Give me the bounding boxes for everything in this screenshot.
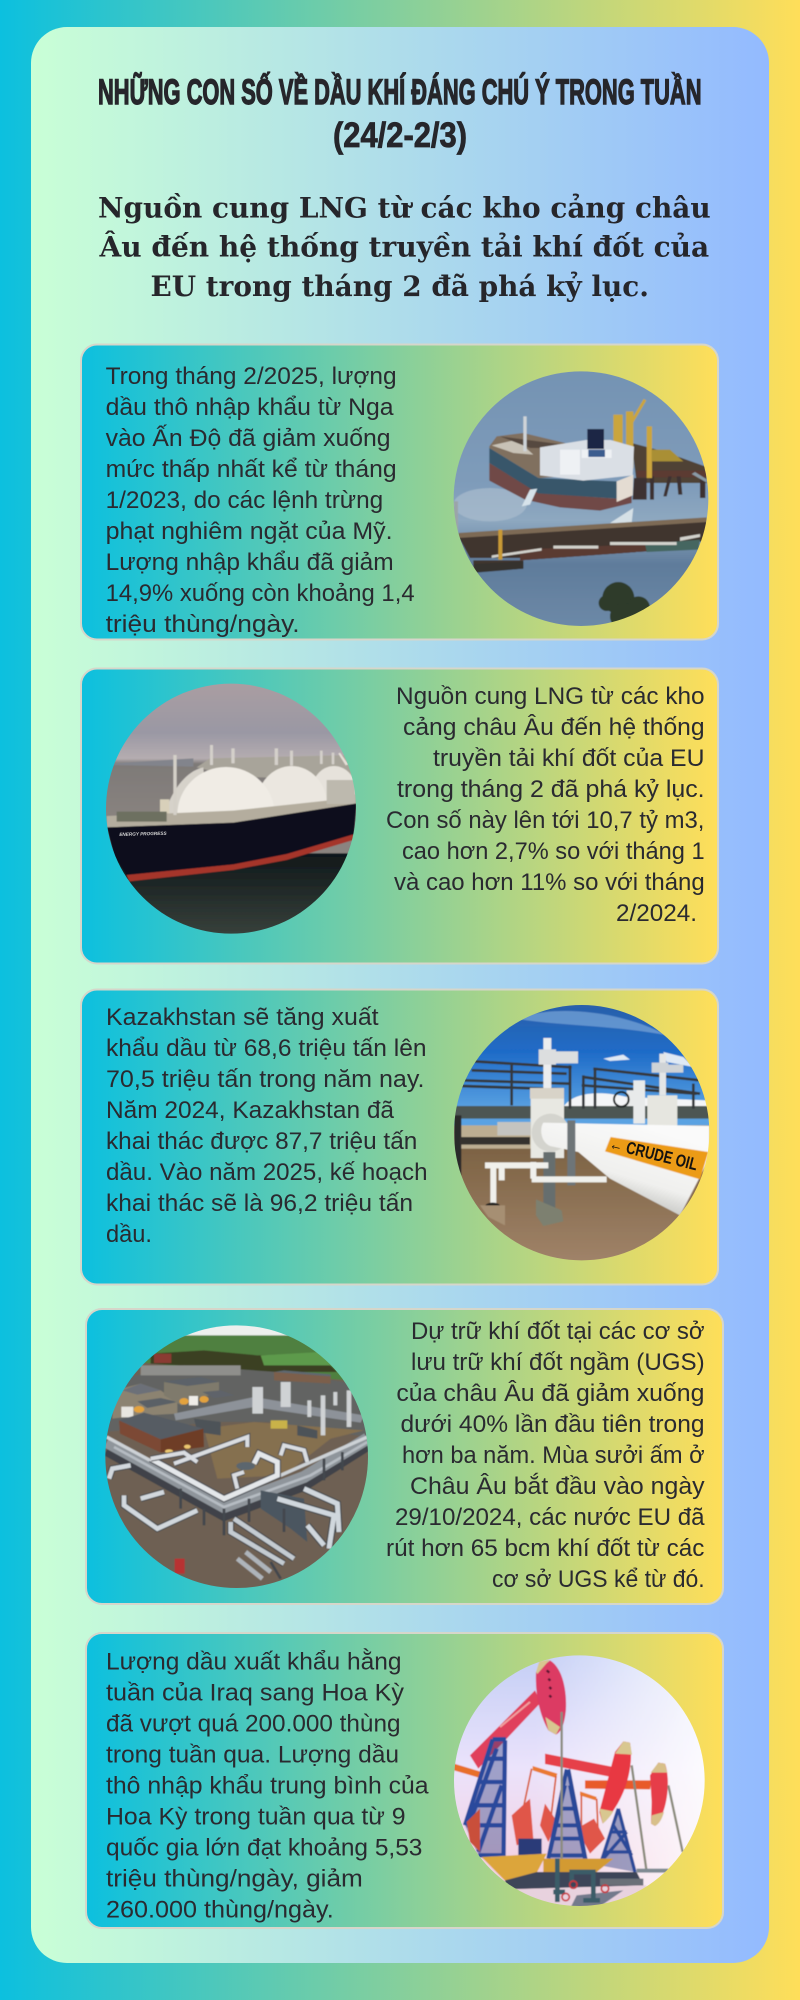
photo: crude oil pipeline <box>450 1002 717 1265</box>
card 2 text: trong tháng 2 đã phá kỷ lục. <box>397 776 705 803</box>
card 5 text: triệu thùng/ngày, giảm <box>106 1866 363 1892</box>
card 2 text <box>386 683 705 927</box>
card 3 text: Kazakhstan sẽ tăng xuất <box>106 1004 379 1031</box>
panel: card 1 India crude imports <box>81 344 718 640</box>
card 4 text: Dự trữ khí đốt tại các cơ sở <box>411 1318 705 1345</box>
card 1 text: triệu thùng/ngày. <box>106 611 300 638</box>
card 3 background <box>81 990 718 1284</box>
card 3 text: dầu. Vào năm 2025, kế hoạch <box>106 1159 427 1186</box>
card 2 text: và cao hơn 11% so với tháng <box>394 869 705 896</box>
card 5 text <box>106 1648 429 1924</box>
card 5 text: trong tuần qua. Lượng dầu <box>106 1742 399 1768</box>
card 1 text: mức thấp nhất kể từ tháng <box>106 456 397 483</box>
card 3 text: khai thác sẽ là 96,2 triệu tấn <box>106 1190 413 1217</box>
card 3 text: dầu. <box>106 1221 152 1248</box>
photo: LNG carrier: ENERGY PROGRESS <box>119 831 168 837</box>
card 5 text: 260.000 thùng/ngày. <box>106 1896 334 1924</box>
card 5 text: đã vượt quá 200.000 thùng <box>106 1710 400 1738</box>
card 1 text: dầu thô nhập khẩu từ Nga <box>106 394 394 421</box>
card 5 text: Lượng dầu xuất khẩu hằng <box>106 1648 402 1676</box>
panel: card 2 LNG supply <box>81 668 718 964</box>
card 1 text <box>106 363 415 638</box>
card 4 text: cơ sở UGS kể từ đó. <box>492 1566 705 1593</box>
photo: oil tanker at jetty <box>450 368 712 630</box>
card 2 text: cao hơn 2,7% so với tháng 1 <box>402 838 705 865</box>
photo: LNG carrier <box>100 680 362 942</box>
subtitle: Âu đến hệ thống truyền tải khí đốt của <box>98 230 709 264</box>
card 2 background <box>81 668 718 964</box>
card 4 text: 29/10/2024, các nước EU đã <box>395 1504 705 1531</box>
photo: crude oil pipeline: ← CRUDE OIL <box>608 1133 700 1174</box>
card 1 text: Lượng nhập khẩu đã giảm <box>106 549 394 576</box>
card 1 text: vào Ấn Độ đã giảm xuống <box>106 424 391 452</box>
card 1 text: 1/2023, do các lệnh trừng <box>106 487 383 514</box>
card 1 text: phạt nghiêm ngặt của Mỹ. <box>106 518 393 545</box>
card 5 text: thô nhập khẩu trung bình của <box>106 1772 429 1800</box>
card 3 text: khẩu dầu từ 68,6 triệu tấn lên <box>106 1035 426 1062</box>
card 4 text <box>386 1318 705 1593</box>
card 5 background <box>86 1633 723 1928</box>
subtitle <box>98 192 711 303</box>
card 4 text: lưu trữ khí đốt ngầm (UGS) <box>411 1349 705 1376</box>
card 5 text: quốc gia lớn đạt khoảng 5,53 <box>106 1834 422 1862</box>
card 5 text: Hoa Kỳ trong tuần qua từ 9 <box>106 1804 406 1830</box>
card 4 text: rút hơn 65 bcm khí đốt từ các <box>386 1535 704 1562</box>
card 1 text: Trong tháng 2/2025, lượng <box>106 363 397 390</box>
card 4 background <box>86 1309 723 1604</box>
panel: card 4 UGS storage <box>86 1309 723 1604</box>
card 3 text: Năm 2024, Kazakhstan đã <box>106 1097 395 1124</box>
card 4 text: Châu Âu bắt đầu vào ngày <box>410 1473 705 1500</box>
photo: gas storage plant aerial <box>104 1322 372 1590</box>
card 4 text: hơn ba năm. Mùa sưởi ấm ở <box>402 1442 705 1469</box>
card 2 text: Nguồn cung LNG từ các kho <box>396 683 705 710</box>
card 2 text: cảng châu Âu đến hệ thống <box>403 714 705 741</box>
card 5 text: tuần của Iraq sang Hoa Kỳ <box>106 1680 404 1706</box>
panel: card 3 Kazakhstan exports <box>81 990 718 1284</box>
card 3 text: 70,5 triệu tấn trong năm nay. <box>106 1066 424 1093</box>
panel: card 5 Iraq and US imports <box>86 1633 723 1928</box>
card 2 text: Con số này lên tới 10,7 tỷ m3, <box>386 807 704 834</box>
card 4 text: dưới 40% lần đầu tiên trong <box>400 1411 704 1438</box>
card 1 text: 14,9% xuống còn khoảng 1,4 <box>106 580 415 607</box>
card 3 text <box>106 1004 427 1248</box>
title <box>98 72 702 155</box>
subtitle: EU trong tháng 2 đã phá kỷ lục. <box>150 270 649 303</box>
card 4 text: của châu Âu đã giảm xuống <box>396 1380 704 1407</box>
subtitle: Nguồn cung LNG từ các kho cảng châu <box>98 192 711 224</box>
card 2 text: truyền tải khí đốt của EU <box>433 745 704 772</box>
card 3 text: khai thác được 87,7 triệu tấn <box>106 1128 417 1155</box>
title: (24/2-2/3) <box>333 116 467 155</box>
photo: oil pumpjacks <box>450 1652 708 1915</box>
card 2 text: 2/2024. <box>616 900 697 927</box>
card 1 background <box>81 344 718 640</box>
